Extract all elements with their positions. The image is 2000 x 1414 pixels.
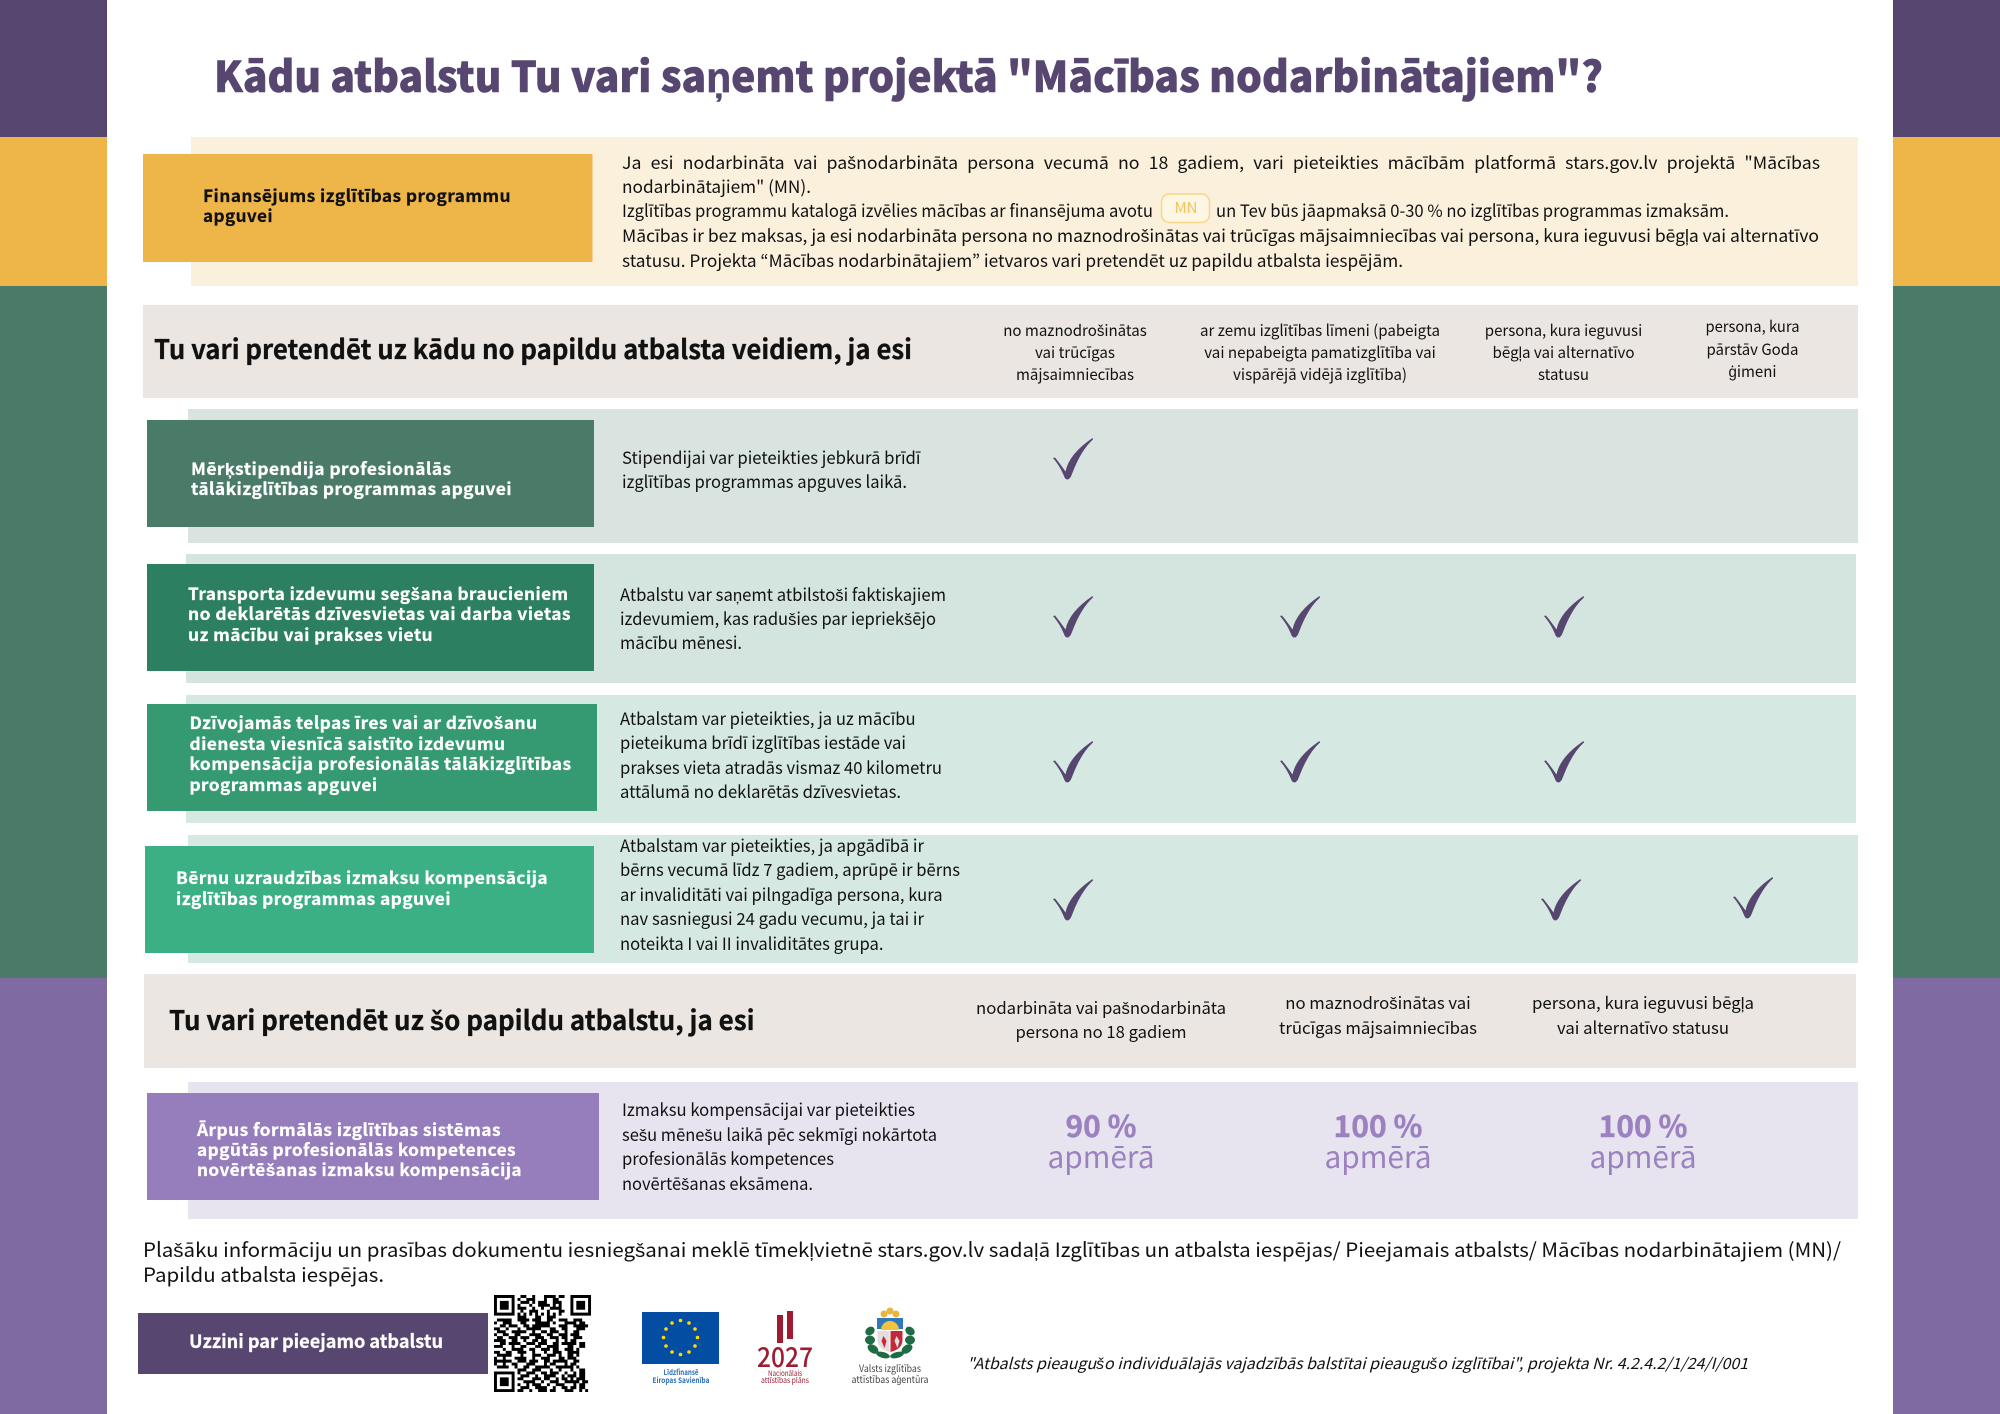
emblem stars bbox=[880, 1308, 900, 1318]
text: further information bbox=[143, 1234, 1841, 1288]
text: further information: Plašāku informāciju un prasības dokumentu iesnieg šanai meklē tīmekļvietnē stars.gov.lv sadaļā Izglītības un atbalsta iespējas/ Pieejamais atbalsts/ Mācības nodarbinātajiem (MN)/ bbox=[143, 1234, 1841, 1263]
label: competence assessment bbox=[147, 1093, 599, 1200]
emblem oak leaves bbox=[864, 1325, 916, 1360]
text: housing description: attālumā no deklarētās dzīvesvietas. bbox=[620, 778, 901, 803]
column heading: low income household: mājsaimniecības bbox=[1016, 363, 1134, 385]
label: target scholarship bbox=[147, 420, 594, 527]
logo: European Union co-financing: Eiropas Savienība bbox=[652, 1375, 710, 1386]
logo: State Education Development Agency: Valsts izglītības bbox=[859, 1361, 921, 1375]
column heading: low education level bbox=[1200, 319, 1440, 385]
column heading: refugee status: bēgļa vai alternatīvo bbox=[1492, 341, 1634, 363]
badge: MN bbox=[1162, 194, 1210, 222]
header: additional support table bbox=[144, 974, 1856, 1068]
column heading: low income household bbox=[1003, 319, 1147, 385]
icons: checks bbox=[1053, 877, 1773, 920]
text: assessment description: sešu mēnešu laikā pēc sekmīgi nokārtota bbox=[622, 1121, 937, 1146]
column heading: low income household: no maznodrošinātas bbox=[1003, 319, 1147, 341]
logo: European Union co-financing: Līdzfinansē bbox=[664, 1367, 699, 1378]
column heading: employed bbox=[976, 995, 1226, 1043]
label: target scholarship: Mērķstipendija profesionālās bbox=[191, 456, 452, 480]
text: transport description: izdevumiem, kas radušies par iepriekšējo bbox=[620, 605, 936, 630]
stat: 90 percent: 90 % bbox=[1066, 1104, 1136, 1146]
label: housing costs: kompensācija profesionālās tālākizglītības bbox=[190, 751, 572, 775]
button: find available support bbox=[138, 1313, 488, 1374]
text: funding description bbox=[622, 149, 1820, 272]
text: childcare description: nav sasniegusi 24 gadu vecumu, ja tai ir bbox=[620, 905, 924, 930]
panel row: childcare costs bbox=[145, 832, 1858, 963]
label: competence assessment: novērtēšanas izmaksu kompensācija bbox=[197, 1157, 522, 1181]
badge: MN: MN bbox=[1174, 197, 1198, 218]
text: funding description: nodarbinātajiem" (MN). bbox=[622, 173, 811, 198]
text: scholarship description: izglītības programmas apguves laikā. bbox=[622, 468, 907, 493]
label: housing costs: dienesta viesnīcā saistīto izdevumu bbox=[190, 731, 506, 755]
panel row: target scholarship bbox=[147, 409, 1858, 543]
column heading: refugee status: persona, kura ieguvusi bbox=[1485, 319, 1642, 341]
text: further information: Papildu atbalsta iespējas. bbox=[143, 1259, 384, 1288]
column heading: low income: trūcīgas mājsaimniecības bbox=[1279, 1015, 1477, 1039]
text: housing description: prakses vieta atradās vismaz 40 kilometru bbox=[620, 754, 942, 779]
column heading: low education level: vai nepabeigta pamatizglītība vai bbox=[1204, 341, 1436, 363]
text: transport description bbox=[620, 581, 946, 654]
logo: National Development Plan 2027: Nacionālais bbox=[768, 1368, 802, 1379]
column heading: family of honour bbox=[1706, 315, 1800, 382]
header: additional support table: Tu vari pretendēt uz šo papildu atbalstu, ja esi bbox=[169, 999, 754, 1038]
panel row: housing costs bbox=[147, 695, 1856, 823]
icon: check bbox=[1053, 438, 1093, 480]
panel row: competence assessment bbox=[147, 1082, 1858, 1219]
logo: State Education Development Agency bbox=[852, 1308, 928, 1386]
stat: 100 percent refugee bbox=[1590, 1104, 1696, 1177]
column heading: employed: nodarbināta vai pašnodarbināta bbox=[976, 995, 1226, 1019]
text: assessment description bbox=[622, 1096, 937, 1195]
text: transport description: mācību mēnesi. bbox=[620, 629, 742, 654]
column heading: family of honour: persona, kura bbox=[1706, 315, 1800, 337]
label: transport costs: uz mācību vai prakses vietu bbox=[188, 622, 433, 646]
label: funding bbox=[143, 154, 592, 262]
stat: 100 percent low income: 100 % bbox=[1334, 1104, 1422, 1146]
stat: 90 percent bbox=[1048, 1104, 1154, 1177]
stat: 90 percent: apmērā bbox=[1048, 1133, 1154, 1177]
column heading: low education level: ar zemu izglītības līmeni (pabeigta bbox=[1200, 319, 1440, 341]
flag stars bbox=[662, 1319, 699, 1356]
label: childcare costs: Bērnu uzraudzības izmaksu kompensācija bbox=[176, 865, 548, 889]
column heading: employed: persona no 18 gadiem bbox=[1016, 1019, 1186, 1043]
text: assessment description: Izmaksu kompensācijai var pieteikties bbox=[622, 1096, 915, 1121]
label: competence assessment: Ārpus formālās izglītības sistēmas bbox=[196, 1117, 501, 1141]
text: assessment description: profesionālās kompetences bbox=[622, 1145, 834, 1170]
text: housing description bbox=[620, 705, 942, 803]
icons: checks bbox=[1053, 741, 1584, 782]
label: target scholarship: tālākizglītības programmas apguvei bbox=[191, 476, 512, 500]
text: childcare description: bērns vecumā līdz 7 gadiem, aprūpē ir bērns bbox=[620, 856, 960, 881]
panel: funding for education programme bbox=[143, 137, 1858, 286]
label: housing costs: programmas apguvei bbox=[190, 772, 378, 796]
right side colour band bbox=[1893, 0, 2000, 1414]
text: childcare description bbox=[620, 832, 960, 955]
QR code bbox=[494, 1295, 591, 1392]
column heading: low income: no maznodrošinātas vai bbox=[1285, 990, 1471, 1014]
icons: checks bbox=[1053, 596, 1584, 638]
label: transport costs: no deklarētās dzīvesvietas vai darba vietas bbox=[188, 601, 571, 625]
panel row: transport costs bbox=[147, 554, 1856, 683]
text: project citation: "Atbalsts pieaugu šo individuālajās vajadzībās balstītai pieaugu šo izglītībai", projekta Nr. 4.2.4.2/1/24/I/001 bbox=[967, 1352, 1748, 1374]
text: scholarship description: Stipendijai var pieteikties jebkurā brīdī bbox=[622, 444, 921, 469]
stat: 100 percent low income bbox=[1324, 1104, 1432, 1177]
column heading: refugee status: vai alternatīvo statusu bbox=[1557, 1015, 1729, 1039]
column heading: refugee status: statusu bbox=[1538, 363, 1589, 385]
logo: National Development Plan 2027: attīstības plāns bbox=[761, 1375, 809, 1386]
text: childcare description: ar invaliditāti vai pilngadīga persona, kura bbox=[620, 881, 943, 906]
title: Kādu atbalstu Tu vari saņemt projektā "Mācības nodarbinātajiem"? bbox=[214, 44, 1603, 105]
column heading: refugee status bbox=[1485, 319, 1642, 385]
column heading: low income household: vai trūcīgas bbox=[1035, 341, 1115, 363]
logo: National Development Plan 2027 bbox=[757, 1311, 813, 1386]
text: scholarship description bbox=[622, 444, 921, 493]
logo: European Union co-financing bbox=[642, 1312, 719, 1386]
column heading: family of honour: pārstāv Goda bbox=[1706, 338, 1798, 360]
text: transport description: Atbalstu var saņemt atbilstoši faktiskajiem bbox=[620, 581, 946, 606]
column heading: low education level: vispārējā vidējā izglītība) bbox=[1233, 363, 1407, 385]
label: transport costs: Transporta izdevumu seg šana braucieniem bbox=[188, 581, 569, 605]
label: childcare costs bbox=[145, 846, 594, 953]
label: housing costs: Dzīvojamās telpas īres vai ar dzīvo šanu bbox=[190, 710, 538, 734]
text: housing description: Atbalstam var pieteikties, ja uz mācību bbox=[620, 705, 916, 730]
button: find available support: Uzzini par pieejamo atbalstu bbox=[189, 1328, 443, 1354]
text: housing description: pieteikuma brīdī izglītības iestāde vai bbox=[620, 729, 906, 754]
left side colour band bbox=[0, 0, 107, 1414]
column heading: family of honour: ģimeni bbox=[1728, 360, 1776, 382]
text: childcare description: Atbalstam var pieteikties, ja apgādībā ir bbox=[620, 832, 924, 857]
header: support types table bbox=[143, 305, 1858, 398]
header: support types table: Tu vari pretendēt uz kādu no papildu atbalsta veidiem, ja esi bbox=[154, 328, 912, 367]
label: competence assessment: apgūtās profesionālās kompetences bbox=[197, 1137, 516, 1161]
column heading: refugee status: persona, kura ieguvusi bēgļa bbox=[1532, 990, 1754, 1014]
text: funding description: Ja esi nodarbināta vai pa šnodarbināta persona vecumā no 18 gadiem, vari pieteikties mācībām platformā stars.gov.lv projektā "Mācības bbox=[622, 149, 1820, 174]
column heading: low income bbox=[1279, 990, 1477, 1039]
stat: 100 percent refugee: apmērā bbox=[1590, 1133, 1696, 1177]
label: funding: apguvei bbox=[203, 203, 273, 227]
logo: State Education Development Agency: attīstības aģentūra bbox=[852, 1372, 928, 1386]
label: housing costs bbox=[147, 704, 597, 811]
text: funding description: Mācības ir bez maksas, ja esi nodarbināta persona no maznodro šinātas vai trūcīgas mājsaimniecības vai persona, kura ieguvusi bēgļa vai alternatīvo bbox=[622, 222, 1819, 247]
column heading: refugee status bbox=[1532, 990, 1754, 1039]
text: funding description: un Tev būs jāapmaksā 0-30 % no izglītības programmas izmaksām. bbox=[1216, 197, 1729, 222]
text: assessment description: novērtēšanas eksāmena. bbox=[622, 1170, 813, 1195]
label: childcare costs: izglītības programmas apguvei bbox=[176, 886, 451, 910]
text: childcare description: noteikta I vai II invaliditātes grupa. bbox=[620, 930, 884, 955]
text: funding description: statusu. Projekta “Mācības nodarbinātajiem” ietvaros vari pretendēt uz papildu atbalsta iespējām. bbox=[622, 247, 1403, 272]
stat: 100 percent low income: apmērā bbox=[1324, 1133, 1432, 1177]
logo: National Development Plan 2027: 2027 bbox=[757, 1336, 813, 1375]
label: transport costs bbox=[147, 564, 594, 671]
label: funding: Finansējums izglītības programmu bbox=[203, 183, 511, 207]
text: funding description: Izglītības programmu katalogā izvēlies mācības ar finansējuma avotu bbox=[622, 197, 1153, 222]
stat: 100 percent refugee: 100 % bbox=[1598, 1104, 1688, 1146]
